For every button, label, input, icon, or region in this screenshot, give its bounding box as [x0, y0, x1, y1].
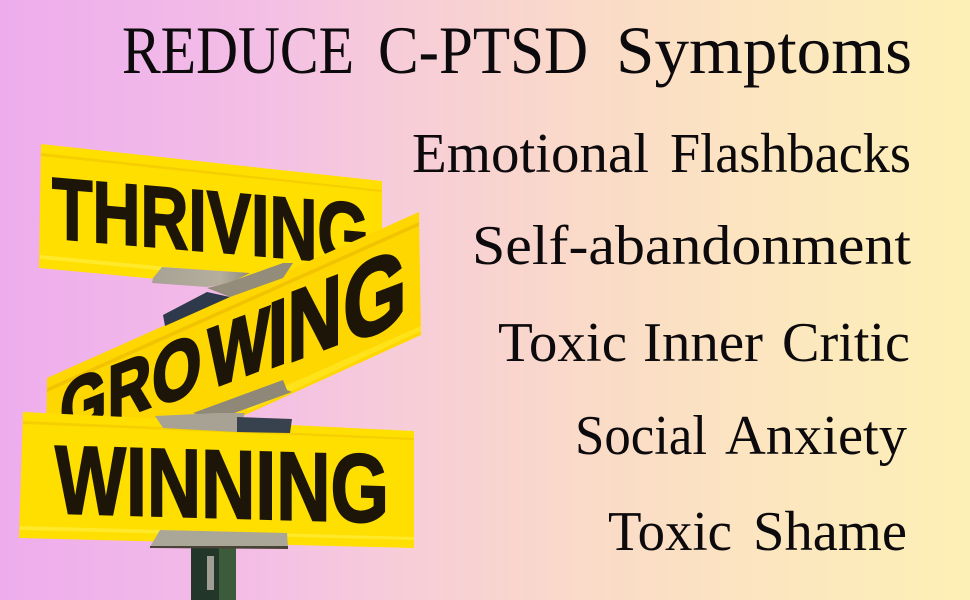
growing lower ridge	[240, 326, 421, 410]
upper bracket shadow	[163, 292, 230, 326]
signpost pole	[191, 545, 236, 600]
symptom: Self-abandonment: Self-abandonment	[472, 215, 911, 277]
growing lettering: N	[288, 253, 342, 385]
symptom: Social Anxiety: Anxiety	[725, 405, 907, 467]
growing lettering: O	[152, 316, 201, 427]
title	[122, 12, 912, 88]
title: Symptoms	[616, 12, 912, 88]
symptom: Toxic Shame: Shame	[753, 501, 907, 563]
bracket: upper	[152, 263, 293, 326]
thriving panel	[39, 144, 382, 300]
symptom: Toxic Shame	[608, 501, 907, 563]
symptom: Emotional Flashbacks	[412, 123, 911, 185]
growing lettering: W	[208, 288, 270, 408]
symptom: Social Anxiety	[575, 405, 907, 467]
symptom: Toxic Inner Critic: Toxic	[498, 312, 627, 374]
winning panel	[19, 412, 414, 548]
title: C-PTSD	[378, 12, 588, 88]
growing panel	[46, 212, 421, 440]
growing lettering: I	[268, 278, 288, 388]
upper bracket arm	[207, 263, 293, 297]
symptom: Emotional Flashbacks: Flashbacks	[670, 123, 911, 185]
thriving lettering: THRIVING	[52, 160, 369, 284]
winning lettering: WINNING	[55, 425, 389, 543]
sign: WINNING	[19, 412, 414, 548]
bracket: winning bottom	[150, 530, 288, 549]
title: REDUCE	[122, 12, 354, 88]
growing lettering: G	[60, 352, 106, 456]
growing ridge	[47, 222, 419, 392]
growing lettering: G	[343, 224, 406, 368]
winning ridge bottom	[20, 526, 414, 540]
upper bracket plate	[152, 267, 250, 287]
thriving ridge bottom	[40, 255, 200, 274]
growing lettering: R	[108, 336, 151, 440]
symptom: Social Anxiety: Social	[575, 405, 707, 467]
sign: THRIVING	[39, 144, 382, 300]
sign: GROWING	[46, 212, 421, 476]
symptom: Toxic Inner Critic	[498, 312, 910, 374]
symptom: Toxic Shame: Toxic	[608, 501, 732, 563]
winning ridge top	[23, 421, 414, 440]
symptom: Toxic Inner Critic: Critic	[782, 312, 910, 374]
symptom: Toxic Inner Critic: Inner	[643, 312, 763, 374]
thriving ridge top	[41, 153, 382, 192]
bracket: winning top	[155, 413, 292, 433]
bracket: middle	[193, 380, 292, 420]
symptom: Emotional Flashbacks: Emotional	[412, 123, 649, 185]
